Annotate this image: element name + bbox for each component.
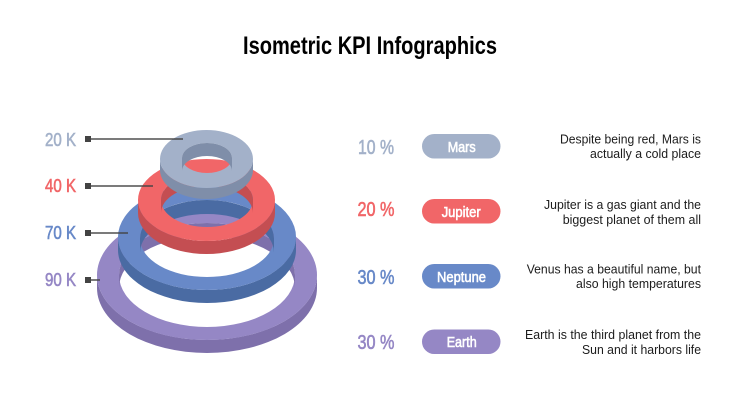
callout: 20 K: 20 K xyxy=(45,130,76,150)
callout: 70 K: 70 K xyxy=(45,223,76,243)
callout: 90 K xyxy=(45,270,100,290)
row: Jupiter xyxy=(358,198,701,227)
row: Earth: 30 % xyxy=(358,332,395,354)
callout: 40 K: 40 K xyxy=(45,176,76,196)
callout: 40 K xyxy=(45,176,153,196)
ring: blue 70 K xyxy=(118,184,296,303)
ring: grey 20 K xyxy=(160,130,253,199)
row: Earth: Earth is the third planet from the xyxy=(525,328,701,342)
row: Neptune: 30 % xyxy=(358,267,395,289)
row: Mars: Mars xyxy=(448,139,476,156)
ring: purple 90 K xyxy=(97,210,317,353)
row: Jupiter: Jupiter xyxy=(442,204,481,221)
row: Earth xyxy=(358,328,701,357)
row: Jupiter: 20 % xyxy=(358,199,395,221)
row: Mars: Despite being red, Mars is xyxy=(560,132,701,146)
row: Neptune: also high temperatures xyxy=(576,277,701,291)
ring: red 40 K xyxy=(138,159,275,254)
row: Neptune: Venus has a beautiful name, but xyxy=(527,262,702,276)
row: Earth: Sun and it harbors life xyxy=(582,343,701,357)
row: Jupiter: Jupiter is a gas giant and the xyxy=(544,198,701,212)
row: Earth: Earth xyxy=(447,334,477,351)
row: Neptune: Neptune xyxy=(437,269,486,286)
row: Neptune xyxy=(358,262,702,291)
callout: 20 K xyxy=(45,130,183,150)
callout: 70 K xyxy=(45,223,128,243)
row: Mars: 10 % xyxy=(358,137,394,159)
row: Mars xyxy=(358,132,701,161)
callout: 90 K: 90 K xyxy=(45,270,76,290)
row: Mars: actually a cold place xyxy=(590,147,701,161)
row: Jupiter: biggest planet of them all xyxy=(563,213,701,227)
isometric ring stack xyxy=(97,130,317,353)
title: Isometric KPI Infographics xyxy=(243,32,497,60)
